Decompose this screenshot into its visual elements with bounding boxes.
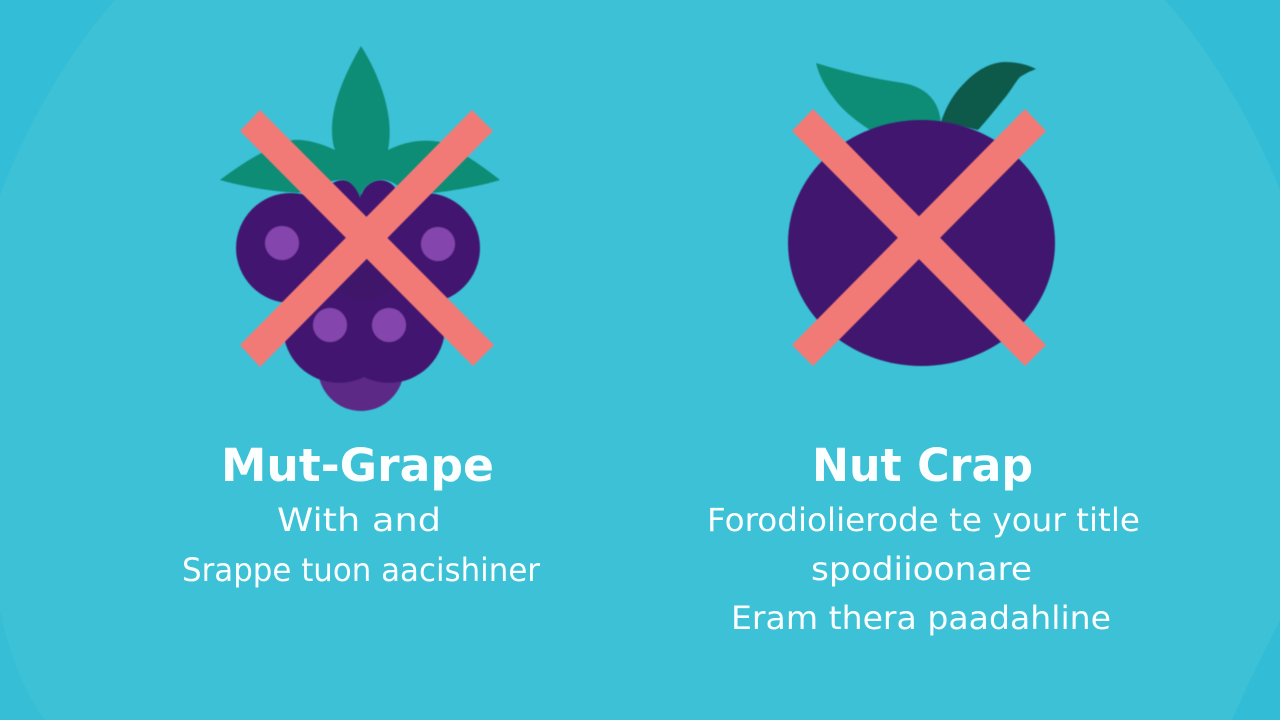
text block: nut description [707,501,1140,637]
text block: grape description [182,501,541,589]
panel: nut [788,62,1055,366]
text block: nut description: Eram thera paadahline [731,599,1111,637]
icon: grape leaves [220,46,500,198]
text block: nut description: spodiioonare [811,550,1032,588]
icon: nut body [788,120,1055,366]
icon: red cross over grape [240,110,494,367]
text block: nut description: Forodiolierode te your title [707,501,1140,539]
text block: grape description: Srappe tuon aacishiner [182,551,541,589]
icon: grape bunch [236,180,480,411]
icon: dark leaf [941,62,1036,130]
icon: red cross over nut [792,109,1046,366]
icon: light leaf [816,63,941,130]
text block: grape description: With and [277,501,441,539]
heading: grape: Mut-Grape [221,439,494,492]
heading: nut: Nut Crap [812,439,1033,492]
panel: grape [220,46,500,411]
